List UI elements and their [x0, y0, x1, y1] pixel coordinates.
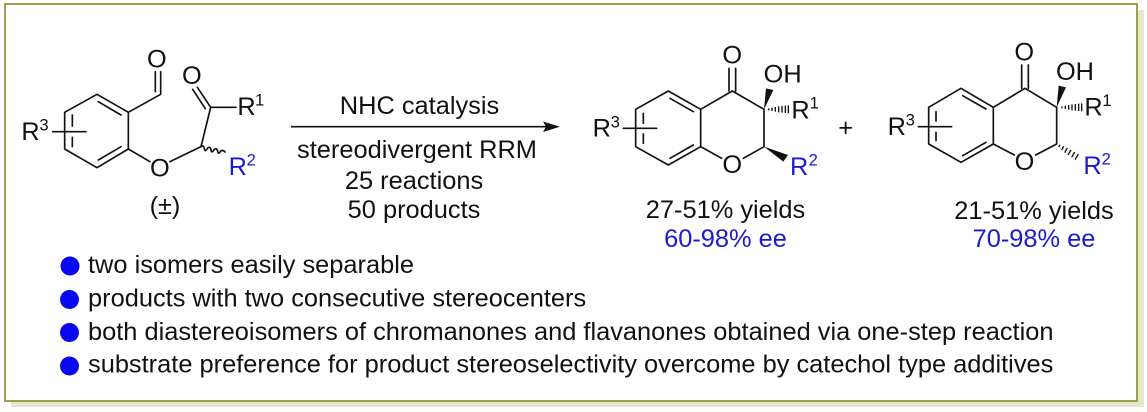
product 2 structure: R — [1084, 94, 1103, 122]
reactant structure: R — [229, 153, 247, 181]
product 1 structure: O — [722, 41, 742, 69]
reactant structure: (±) — [150, 192, 180, 220]
product 1 structure: 3 — [611, 112, 620, 131]
product 1 yield: 27-51% yields — [646, 196, 805, 224]
reaction arrow — [291, 122, 560, 132]
product 1 structure: R — [593, 115, 611, 143]
reactant structure: O — [150, 155, 170, 183]
product 1 structure: O — [722, 151, 742, 179]
wedge and hash bonds — [764, 88, 773, 109]
bullet list: products with two consecutive stereocenters — [88, 285, 586, 313]
reaction conditions: 50 products — [348, 196, 480, 224]
bullet list — [60, 251, 1053, 379]
product 1 structure: OH — [764, 61, 802, 89]
product 2 yield: 21-51% yields — [954, 197, 1114, 225]
product 2 structure: 1 — [1102, 91, 1112, 110]
reactant structure: O — [182, 62, 202, 90]
product 2 structure: 3 — [906, 111, 915, 130]
product 2 structure: O — [1015, 148, 1034, 176]
bullet list: both diastereoisomers of chromanones and flavanones obtained via one-step reaction — [88, 318, 1053, 346]
reaction conditions — [297, 92, 537, 224]
reactant structure: R — [237, 93, 256, 121]
reaction conditions: NHC catalysis — [340, 92, 499, 120]
reactant structure: R — [21, 118, 40, 146]
plus sign: + — [838, 114, 853, 142]
product 1 structure: R — [790, 153, 808, 181]
product 1 structure: R — [791, 96, 810, 124]
product 1 structure: 2 — [809, 150, 818, 169]
reaction conditions: stereodivergent RRM — [297, 136, 537, 164]
reactant structure: 2 — [247, 150, 256, 169]
product 2 ee: 70-98% ee — [973, 225, 1095, 253]
reactant structure: 1 — [255, 90, 264, 109]
product 2 structure: 2 — [1102, 149, 1111, 168]
product 1 ee: 60-98% ee — [664, 225, 787, 253]
product 1 structure — [593, 41, 819, 181]
product 1 structure: 1 — [810, 94, 819, 113]
product 2 structure: O — [1014, 39, 1034, 67]
bullet list: two isomers easily separable — [88, 251, 414, 279]
reactant structure: O — [147, 46, 167, 74]
reaction conditions: 25 reactions — [345, 167, 483, 195]
reactant structure: 3 — [39, 116, 49, 135]
bullet list: substrate preference for product stereoselectivity overcome by catechol type additives — [88, 351, 1053, 379]
product 2 yield — [954, 197, 1114, 253]
wedge and hash bonds — [1057, 86, 1066, 107]
product 2 structure: R — [888, 113, 906, 141]
product 2 structure — [888, 39, 1112, 180]
reactant structure — [21, 46, 264, 220]
product 1 yield — [646, 196, 805, 253]
product 2 structure: R — [1083, 152, 1102, 180]
product 2 structure: OH — [1056, 58, 1094, 86]
